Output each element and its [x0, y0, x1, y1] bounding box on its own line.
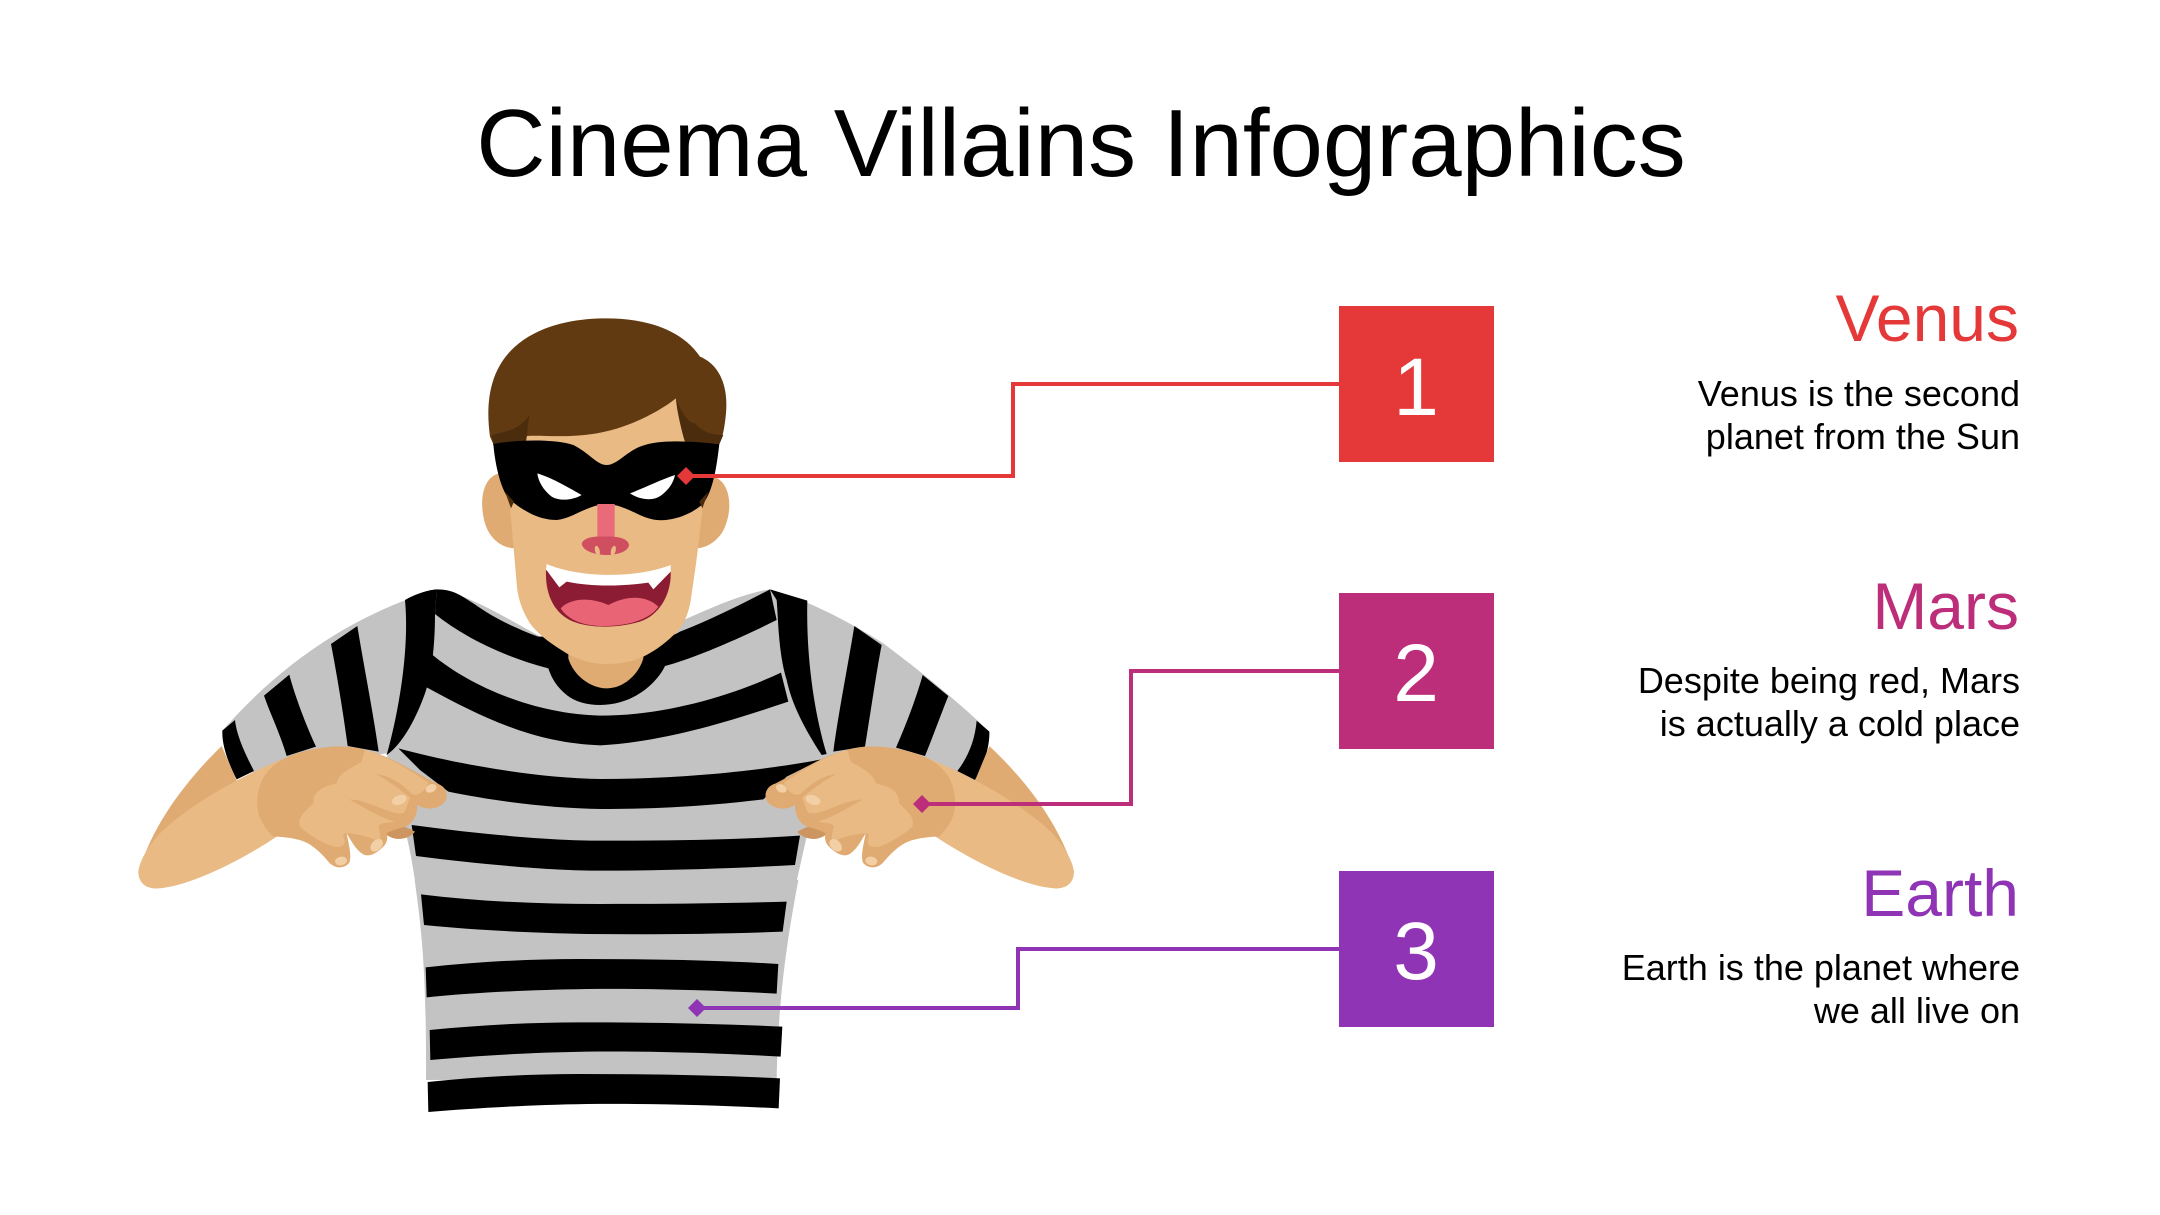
text block: Mars	[1638, 569, 2020, 744]
text block: Earth: we all live on	[1813, 990, 2020, 1031]
eyes	[537, 473, 675, 500]
text block: Earth	[1622, 856, 2020, 1031]
number box 1	[1339, 306, 1494, 462]
connector 1 with diamond marker	[677, 384, 1339, 485]
connector 2 with diamond marker	[913, 671, 1339, 813]
number box 1: 1	[1393, 342, 1439, 433]
text block: Venus: Venus	[1836, 281, 2019, 355]
title: Cinema Villains Infographics	[476, 90, 1686, 197]
text block: Earth: Earth is the planet where	[1622, 947, 2020, 988]
neck	[568, 647, 643, 688]
text block: Earth: Earth	[1861, 856, 2019, 930]
left arm and hand	[138, 746, 447, 888]
shirt: right shoulder, sleeve and chest	[600, 589, 989, 903]
text block: Mars: is actually a cold place	[1660, 703, 2020, 744]
number box 3: 3	[1393, 906, 1439, 997]
face	[508, 397, 705, 664]
mask	[493, 440, 719, 520]
number box 2	[1339, 593, 1494, 749]
number box 2: 2	[1393, 628, 1439, 719]
shirt: lower torso	[415, 880, 798, 1112]
head with hair and mask	[482, 318, 729, 688]
number box 3	[1339, 871, 1494, 1027]
ears	[482, 473, 729, 548]
hair	[488, 318, 726, 444]
nose	[597, 504, 615, 537]
text block: Mars: Despite being red, Mars	[1638, 660, 2020, 701]
text block: Venus: planet from the Sun	[1706, 416, 2020, 457]
right arm and hand	[765, 746, 1074, 888]
shirt: left shoulder, sleeve and chest	[222, 589, 601, 903]
connector 3 with diamond marker	[688, 949, 1339, 1017]
text block: Venus	[1698, 281, 2020, 457]
illustration: masked villain in striped shirt	[138, 318, 1074, 1112]
text block: Mars: Mars	[1872, 569, 2019, 643]
text block: Venus: Venus is the second	[1698, 373, 2020, 414]
mouth	[546, 570, 671, 627]
